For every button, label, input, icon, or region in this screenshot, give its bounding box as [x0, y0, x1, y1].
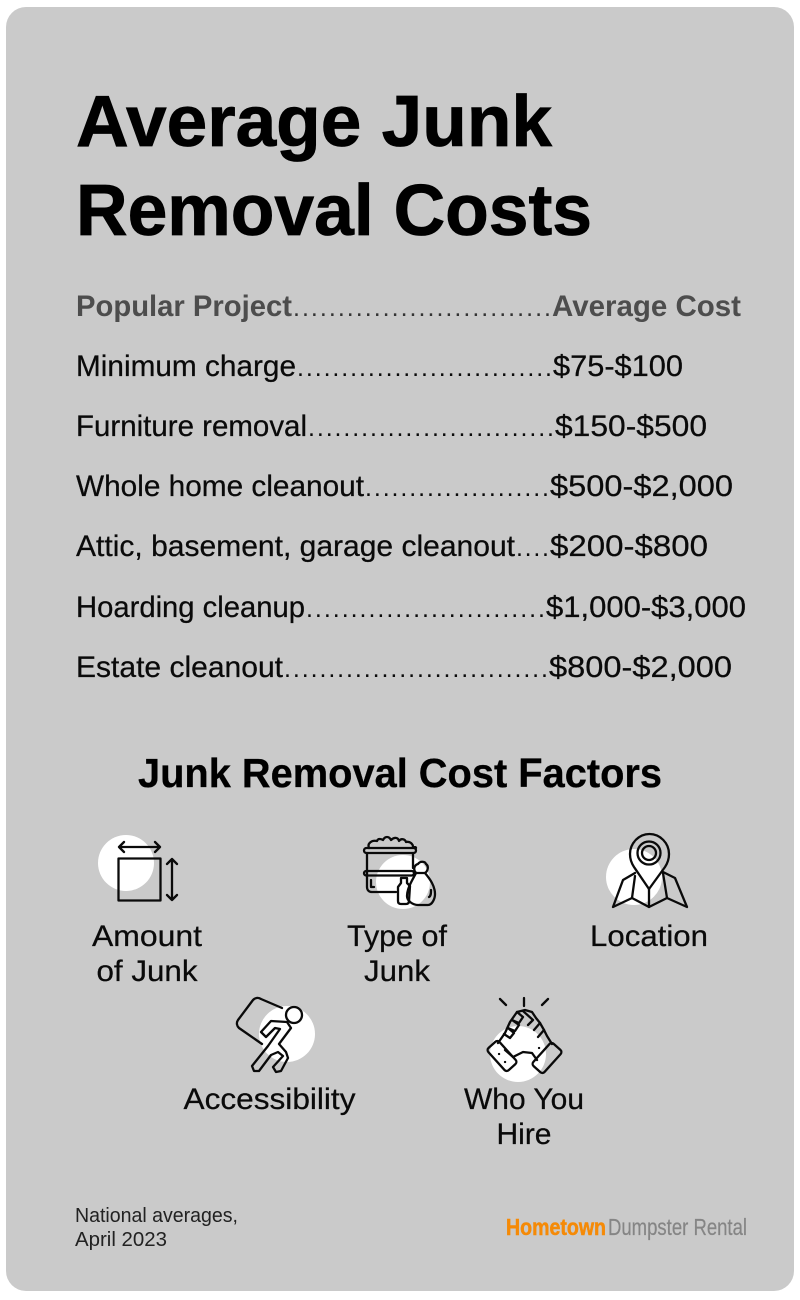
factor: accessibility — [184, 998, 356, 1116]
icon: person carrying load — [237, 998, 315, 1072]
row: furniture removal: ............................ — [308, 414, 554, 442]
label: of Junk — [96, 955, 199, 988]
row: minimum charge: Minimum charge — [76, 350, 296, 383]
icon: dumpster and trash bag — [364, 837, 435, 909]
footnote: National averages, — [75, 1205, 238, 1227]
row: whole home cleanout: $500-$2,000 — [550, 470, 733, 503]
row: estate cleanout: $800-$2,000 — [549, 651, 732, 684]
row: whole home cleanout — [76, 470, 733, 503]
row: furniture removal: Furniture removal — [76, 410, 307, 443]
label — [464, 1083, 584, 1151]
label: Hire — [496, 1118, 552, 1151]
row: furniture removal — [76, 410, 707, 443]
cost table — [76, 290, 746, 684]
title — [76, 82, 592, 251]
footnote: April 2023 — [75, 1229, 167, 1251]
row: whole home cleanout: Whole home cleanout — [76, 470, 365, 503]
row: estate cleanout: .............................. — [284, 655, 548, 683]
table header: Average Cost — [552, 290, 741, 323]
icon: map pin — [606, 834, 687, 907]
table header: ............................. — [293, 294, 551, 322]
row: estate cleanout: Estate cleanout — [76, 651, 284, 684]
logo: Dumpster Rental — [608, 1214, 747, 1240]
row: attic basement garage cleanout: $200-$800 — [550, 530, 708, 563]
row: minimum charge — [76, 350, 683, 383]
label: Who You — [464, 1083, 584, 1116]
section heading: Junk Removal Cost Factors — [138, 750, 662, 796]
label: Amount — [92, 920, 203, 953]
row: minimum charge: $75-$100 — [553, 350, 683, 383]
label: Type of — [347, 920, 448, 953]
icon: clasped hands — [486, 998, 563, 1082]
label — [347, 920, 448, 988]
factor: location — [590, 834, 708, 953]
icon: box with dimensions — [98, 835, 177, 900]
label: Junk — [364, 955, 431, 988]
label — [92, 920, 203, 988]
row: whole home cleanout: ..................... — [365, 474, 549, 502]
table header — [76, 290, 741, 323]
row: attic basement garage cleanout — [76, 530, 708, 563]
row: hoarding cleanup — [76, 591, 746, 624]
footnote — [75, 1205, 238, 1251]
row: estate cleanout — [76, 651, 732, 684]
row: furniture removal: $150-$500 — [555, 410, 707, 443]
logo — [506, 1214, 747, 1240]
table header: Popular Project — [76, 290, 292, 323]
title: Removal Costs — [76, 171, 592, 251]
factor: who you hire — [464, 998, 584, 1151]
row: minimum charge: ............................. — [297, 354, 552, 382]
row: hoarding cleanup: ........................... — [306, 595, 545, 623]
row: hoarding cleanup: Hoarding cleanup — [76, 591, 305, 624]
label: Accessibility — [184, 1083, 356, 1116]
label: Location — [590, 920, 708, 953]
logo: Hometown — [506, 1214, 606, 1240]
row: attic basement garage cleanout: .... — [516, 534, 549, 562]
factor: type of junk — [347, 837, 448, 988]
row: hoarding cleanup: $1,000-$3,000 — [546, 591, 746, 624]
row: attic basement garage cleanout: Attic, basement, garage cleanout — [76, 530, 516, 563]
title: Average Junk — [76, 82, 553, 162]
factor: amount of junk — [92, 835, 203, 988]
